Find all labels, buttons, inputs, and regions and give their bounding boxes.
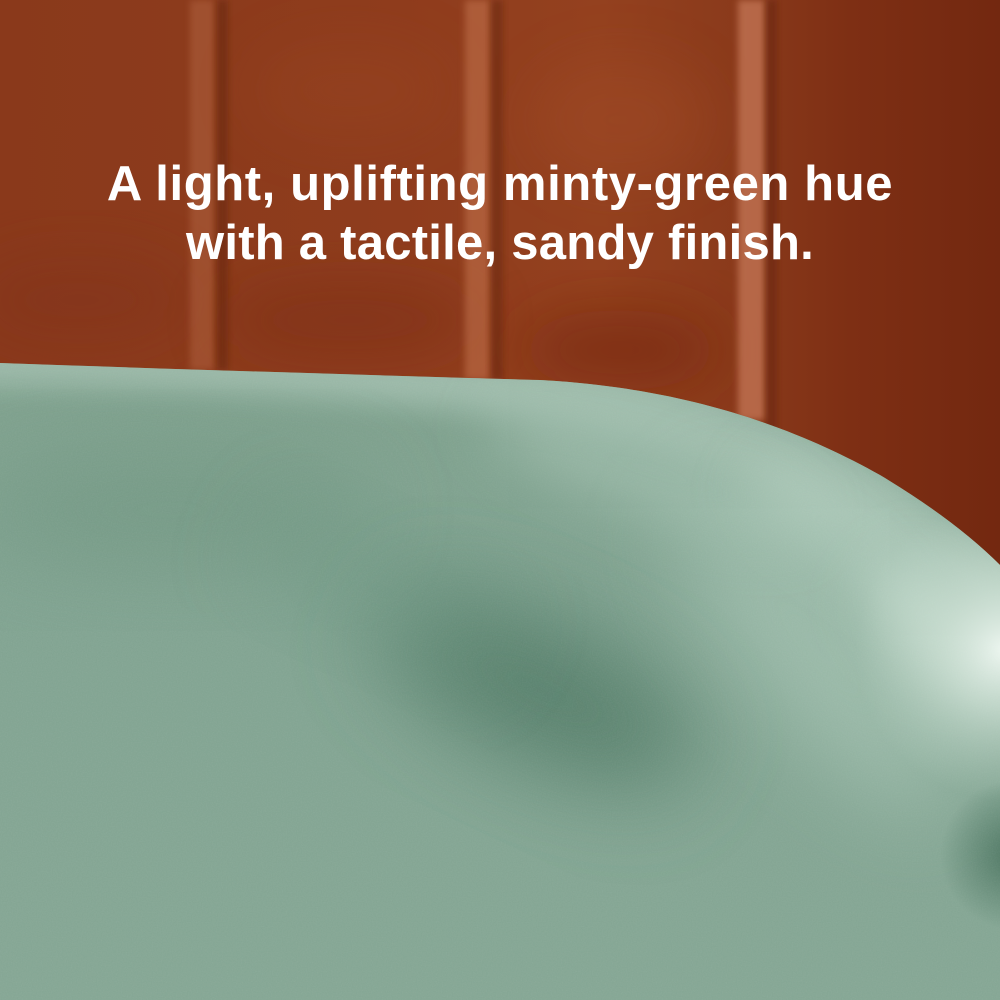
mint green curved product surface [0, 363, 1000, 1000]
title [107, 157, 893, 270]
title: A light, uplifting minty-green hue [107, 157, 893, 211]
title: with a tactile, sandy finish. [186, 216, 814, 270]
